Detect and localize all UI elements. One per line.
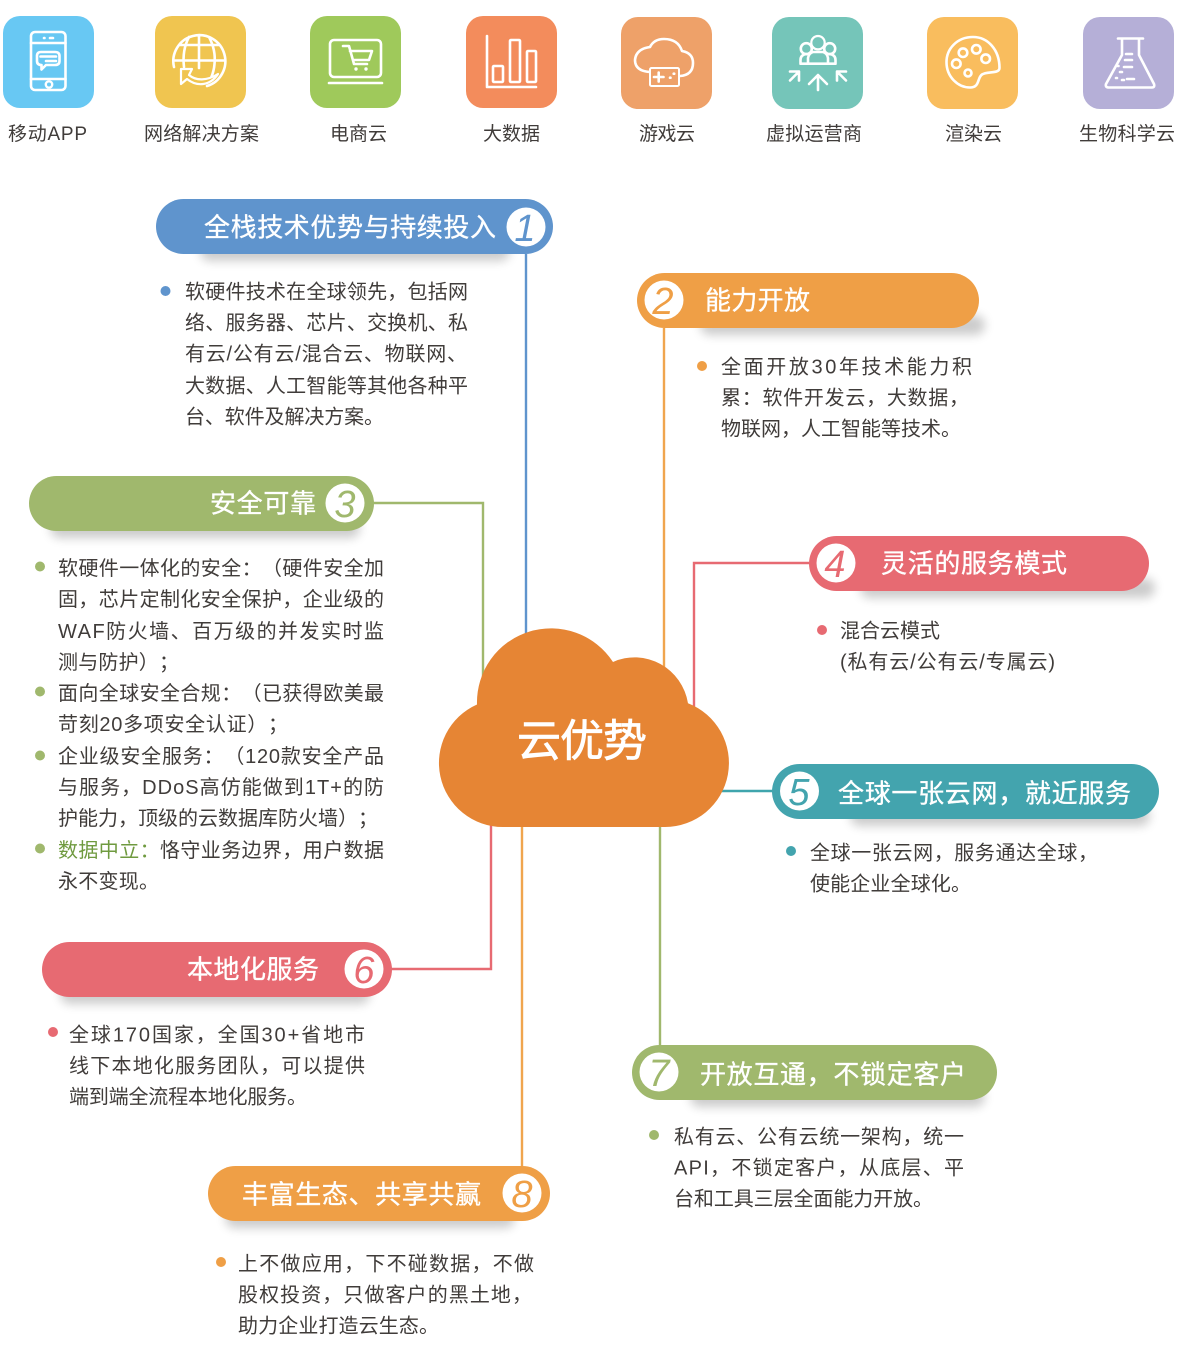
icon: e-commerce [310,16,401,108]
connector: 2 to cloud [663,328,665,680]
pill 2 heading: 2 [651,281,674,323]
panel 2 text: 物联网，人工智能等技术。 [721,418,961,440]
panel 6 text: 线下本地化服务团队，可以提供 [69,1054,365,1078]
panel 7 text: 私有云、公有云统一架构，统一 [674,1126,964,1148]
panel 6 text: 端到端全流程本地化服务。 [69,1086,307,1108]
icon: mobile app [3,16,94,108]
panel 3 text: 苛刻20多项安全认证）； [58,713,288,736]
panel 7 text [649,1126,964,1210]
central cloud [439,628,729,827]
panel 8 text: 助力企业打造云生态。 [238,1314,439,1338]
panel 2 text: 全面开放30年技术能力积 [721,356,972,378]
panel 6 text [48,1024,365,1108]
pill 2 heading [637,273,985,335]
icon: network globe [155,16,246,108]
panel 4 text: (私有云/公有云/专属云) [840,650,1055,674]
pill 4 heading [809,536,1155,598]
icon: game cloud [621,17,712,109]
connector: 7 to cloud [659,820,661,1045]
panel 7 text: 台和工具三层全面能力开放。 [674,1188,933,1210]
connector: 1 to cloud [525,254,527,640]
panel 3 text: 面向全球安全合规：（已获得欧美最 [58,682,384,705]
pill 1 heading [156,199,553,261]
pill 3 heading: 3 [334,484,356,526]
connector: 6 to cloud [391,820,491,969]
pill 8 heading: 丰富生态、共享共赢 [242,1180,481,1210]
pill 7 heading [632,1045,997,1107]
panel 3 text [35,557,384,893]
pill 8 heading: 8 [511,1174,533,1216]
panel 3 text: 固，芯片定制化安全保护，企业级的 [58,588,384,611]
panel 3 text: 护能力，顶级的云数据库防火墙）； [58,807,378,830]
connector: 4 to cloud [694,563,809,712]
panel 5 text [786,842,1098,896]
connector: 5 to cloud [720,790,773,792]
panel 3 text: 与服务，DDoS高仿能做到1T+的防 [58,776,384,799]
panel 3 text: 软硬件一体化的安全：（硬件安全加 [58,557,384,580]
panel 1 text: 络、服务器、芯片、交换机、私 [185,312,468,334]
label: mobile app: 移动APP [8,123,87,145]
pill 6 heading [42,942,392,1004]
icon: big data [466,16,557,108]
pill 8 heading [208,1166,550,1228]
panel 1 text: 软硬件技术在全球领先，包括网 [185,280,468,304]
panel 6 text: 全球170国家，全国30+省地市 [69,1024,365,1046]
pill 6 heading: 6 [353,950,375,992]
panel 4 text: 混合云模式 [840,620,940,642]
label: bio-science cloud: 生物科学云 [1079,123,1175,145]
pill 4 heading: 4 [824,544,846,586]
pill 5 heading [772,764,1159,826]
label: game cloud: 游戏云 [639,123,695,145]
pill 1 heading: 1 [514,208,536,250]
panel 5 text: 全球一张云网，服务通达全球， [810,842,1098,864]
pill 3 heading [29,476,374,538]
icon: virtual operator [772,17,863,109]
connector: 3 to cloud [373,503,483,680]
panel 1 text: 大数据、人工智能等其他各种平 [185,374,468,398]
panel 4 text [817,620,1055,674]
panel 1 text: 有云/公有云/混合云、物联网、 [185,342,467,366]
label: big data: 大数据 [483,123,540,145]
panel 7 text: API，不锁定客户，从底层、平 [674,1156,964,1180]
pill 4 heading: 灵活的服务模式 [881,548,1067,578]
panel 8 text: 股权投资，只做客户的黑土地， [238,1284,532,1306]
label: virtual operator: 虚拟运营商 [766,123,862,145]
panel 3 text: 数据中立：恪守业务边界，用户数据 [58,839,384,862]
panel 1 text [160,280,468,428]
label: render cloud: 渲染云 [945,123,1002,145]
panel 2 text: 累：软件开发云，大数据， [721,386,969,410]
pill 3 heading: 安全可靠 [210,488,316,518]
panel 3 text: 企业级安全服务：（120款安全产品 [58,745,384,768]
panel 2 text [697,356,972,440]
pill 7 heading: 7 [648,1053,671,1095]
connector: 8 to cloud [521,820,523,1166]
panel 3 text: 永不变现。 [58,870,159,893]
pill 5 heading: 全球一张云网，就近服务 [838,778,1131,808]
label: network solutions: 网络解决方案 [144,123,259,145]
icon: render palette [927,17,1018,109]
pill 5 heading: 5 [788,772,810,814]
pill 2 heading: 能力开放 [705,286,810,316]
panel 3 text: WAF防火墙、百万级的并发实时监 [58,620,384,643]
pill 6 heading: 本地化服务 [187,954,319,984]
pill 1 heading: 全栈技术优势与持续投入 [204,212,496,242]
panel 8 text: 上不做应用，下不碰数据，不做 [238,1252,534,1276]
icon: flask [1083,17,1174,109]
panel 3 text: 测与防护）； [58,651,179,674]
label: e-commerce cloud: 电商云 [330,123,387,145]
panel 8 text [216,1252,534,1338]
panel 1 text: 台、软件及解决方案。 [185,406,384,428]
pill 7 heading: 开放互通，不锁定客户 [700,1060,966,1090]
panel 5 text: 使能企业全球化。 [810,872,971,896]
central cloud: 云优势 [517,717,647,766]
